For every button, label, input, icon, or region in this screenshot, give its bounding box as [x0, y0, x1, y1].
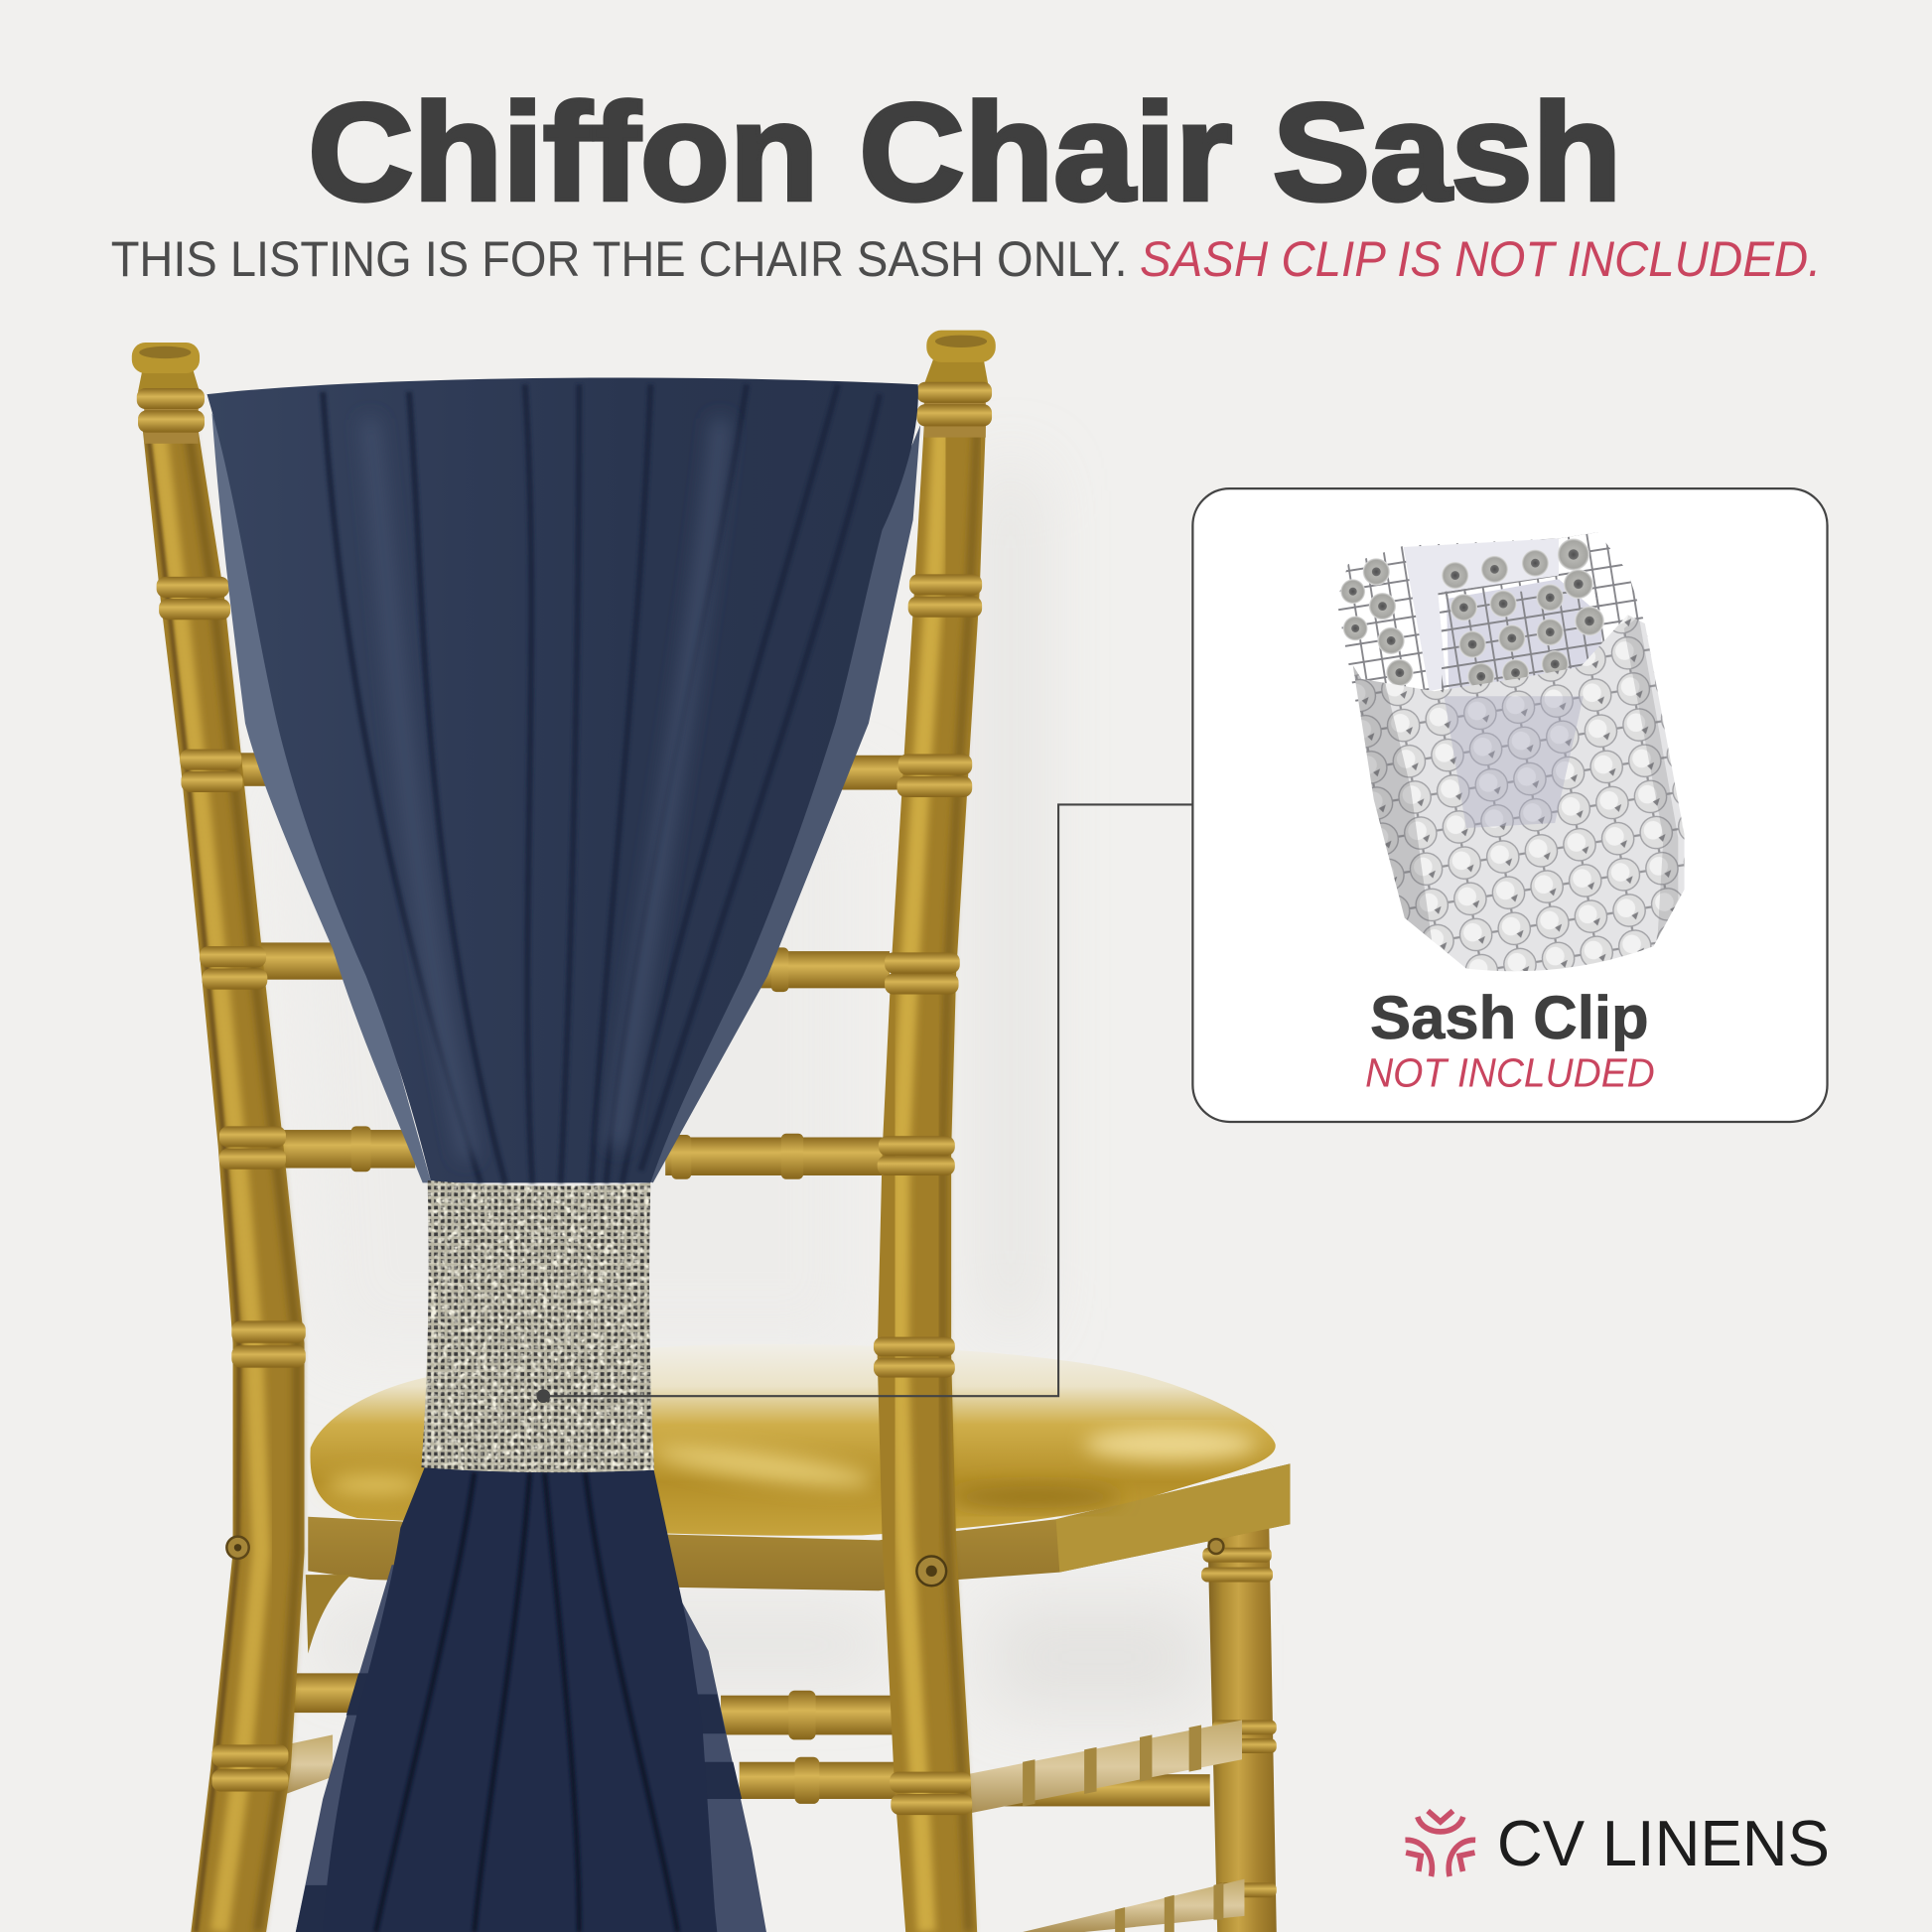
left post: [143, 431, 305, 1932]
sash clip product image: [1330, 530, 1688, 971]
chair illustration: [132, 331, 1290, 1932]
label: Not included: NOT INCLUDED: [1365, 1050, 1655, 1096]
back right leg: [1201, 1528, 1277, 1932]
bolts: [226, 1537, 1223, 1586]
navy chiffon sash, lower tail: [296, 1466, 766, 1932]
subtitle: clip warning: SASH CLIP IS NOT INCLUDED.: [1140, 231, 1821, 287]
soft studio shadow behind chair: [283, 469, 1207, 1713]
subtitle: listing note: THIS LISTING IS FOR THE CHAIR SASH ONLY.: [111, 231, 1128, 287]
sheer edges: [211, 413, 431, 1182]
rhinestone sash clip on chair: [421, 1180, 654, 1473]
title: Chiffon Chair Sash: [308, 75, 1621, 229]
drape highlights: [369, 419, 721, 1159]
seat frame: [306, 1463, 1290, 1654]
seat cushion: [310, 1344, 1276, 1536]
subtitle: [111, 231, 1821, 287]
right post: [878, 425, 986, 1932]
wordmark: CV LINENS: [1497, 1808, 1830, 1879]
connector line: [536, 804, 1192, 1403]
label: Sash Clip: Sash Clip: [1370, 984, 1649, 1051]
sheer edges: [296, 1565, 766, 1932]
rungs: [231, 753, 1244, 1932]
drape folds: [323, 384, 880, 1182]
callout card: sash clip: [1192, 488, 1828, 1122]
left post rings: [157, 577, 306, 1792]
tail folds: [376, 1472, 678, 1932]
left finial: [132, 343, 205, 444]
brand logo: [1405, 1808, 1830, 1879]
icon: CV Linens mark: [1405, 1811, 1475, 1876]
right finial: [916, 331, 996, 438]
navy chiffon sash, upper drape: [207, 378, 920, 1182]
right post rings: [874, 574, 982, 1815]
